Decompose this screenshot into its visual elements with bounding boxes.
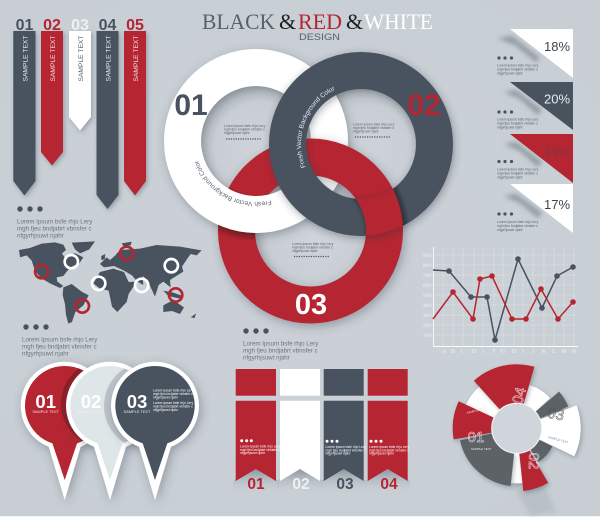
triangle 17%: nfgyrhjsuwt njahr <box>497 228 524 232</box>
segment red left <box>453 401 494 439</box>
pin 03 <box>111 362 199 500</box>
donut labels: SAMPLE TEXT <box>471 447 492 451</box>
donut labels: SAMPLE TEXT <box>548 435 569 444</box>
ribbon 01: mgh fjeu bndjabrt vbnsfer c <box>240 448 280 452</box>
x axis labels: C <box>461 349 465 355</box>
line chart <box>423 247 578 355</box>
triangle 18%: nfgyrhjsuwt njahr <box>497 72 524 76</box>
text block: below rings: Lorem Ipsum bsfe rhjo Lery <box>243 340 319 348</box>
segment dark small <box>536 392 568 418</box>
donut labels: SAMPLE TEXT <box>466 406 487 415</box>
ribbon 04: 04 <box>380 476 398 493</box>
curved text dark ring: Fresh Vector Background Color <box>296 86 334 168</box>
pin 02: SAMPLE TEXT <box>78 409 105 414</box>
banner 04 <box>96 17 118 209</box>
triangle 20%: Lorem Ipsum bsfe rhjo Lery <box>497 118 539 122</box>
x axis labels: M <box>561 349 567 355</box>
pin 03: mgh fjeu bndjabrt vbnsfer c <box>153 404 193 408</box>
ribbon 04: Lorem Ipsum bsfe rhjo Lery <box>369 445 409 449</box>
segment white small <box>524 385 550 412</box>
y axis labels: 400 <box>423 303 431 309</box>
ring 02 text <box>353 122 395 137</box>
pin 01 <box>17 359 94 502</box>
banner 03: SAMPLE TEXT <box>78 36 85 81</box>
pin 03: mgh fjeu bndjabrt vbnsfer c <box>153 392 193 396</box>
x axis labels: I <box>522 349 524 355</box>
triangle 14%: nfgyrhjsuwt njahr <box>497 176 524 180</box>
segment red top <box>474 364 534 410</box>
curved text white ring: Fresh Vector Background Color <box>194 161 272 207</box>
title: & <box>346 9 363 34</box>
triangle 20%: 20% <box>544 92 570 106</box>
pin 02: 02 <box>81 391 101 412</box>
ribbon 02 <box>277 369 323 494</box>
africa <box>93 269 137 312</box>
south america <box>63 284 89 324</box>
banner 04: SAMPLE TEXT <box>106 36 112 81</box>
north america <box>19 242 83 288</box>
ring number 03: 03 <box>295 289 327 321</box>
text block: below rings: mgh fjeu bndjabrt vbnsfer c <box>243 348 318 354</box>
ribbon 03: mgh fjeu bndjabrt vbnsfer c <box>326 448 366 452</box>
panel: percentage triangles <box>497 29 573 233</box>
text block: below rings <box>243 328 319 362</box>
pin 01: 01 <box>35 391 56 412</box>
text block: above map <box>17 206 93 240</box>
banner 03 <box>69 17 91 130</box>
ring number 02: 02 <box>407 89 441 122</box>
ring 03 text: mgh fjeu bndjabrt vbnsfer c <box>292 246 333 250</box>
ring 01 text: mgh fjeu bndjabrt vbnsfer c <box>224 128 265 132</box>
x axis labels: N <box>572 349 577 355</box>
x axis labels: J <box>532 349 535 355</box>
ring 03 red <box>236 157 384 305</box>
triangle 18%: Lorem Ipsum bsfe rhjo Lery <box>497 64 539 68</box>
donut labels: 01 <box>468 429 484 446</box>
text block: above map: mgh fjeu bndjabrt vbnsfer c <box>17 226 92 232</box>
ribbon 01: 01 <box>247 476 265 493</box>
pin 03: nfgyrhjsuwt njahr <box>153 408 179 412</box>
ring 03 text: nfgyrhjsuwt njahr <box>292 249 319 253</box>
x axis labels: F <box>492 349 496 355</box>
ring number 01: 01 <box>174 89 208 122</box>
ribbon 03: Lorem Ipsum bsfe rhjo Lery <box>326 445 366 449</box>
x axis labels <box>442 349 577 355</box>
banner 05 <box>124 17 146 196</box>
x axis labels: D <box>472 349 477 355</box>
title: BLACK <box>202 9 275 34</box>
donut labels: 03 <box>546 405 565 424</box>
text block: below map <box>22 324 98 358</box>
ribbon 04: nfgyrhjsuwt njahr <box>369 452 395 456</box>
banner 05: 05 <box>126 17 144 34</box>
segment white bottom <box>511 453 522 483</box>
segment white upper-left <box>466 387 500 418</box>
ribbon 04 <box>365 369 410 494</box>
panel: ribbons <box>233 369 410 494</box>
ring 03 text <box>292 242 334 256</box>
x axis labels: B <box>451 349 455 355</box>
y axis labels: 200 <box>423 323 431 329</box>
ring 01 overlap <box>164 150 306 233</box>
ribbon 03: 03 <box>336 476 354 493</box>
y axis labels: 900 <box>423 253 431 259</box>
ribbon 01: Lorem Ipsum bsfe rhjo Lery <box>240 444 280 448</box>
donut labels: 04 <box>509 386 530 406</box>
x axis labels: G <box>501 349 506 355</box>
banner 01 <box>13 17 36 196</box>
triangle 18%: mgh fjeu bndjabrt vbnsfer c <box>497 68 538 72</box>
y axis labels: 700 <box>423 273 431 279</box>
red shadow on dark <box>352 186 408 236</box>
triangle 20% <box>497 82 573 130</box>
ribbon 01: nfgyrhjsuwt njahr <box>240 451 266 455</box>
banner 02: 02 <box>43 17 61 34</box>
greenland <box>72 241 95 253</box>
ring 03 text: Lorem Ipsum bsfe rhjo Lery <box>292 242 334 246</box>
donut labels: 02 <box>525 453 542 469</box>
title: DESIGN <box>299 32 340 43</box>
text block: below map: mgh fjeu bndjabrt vbnsfer c <box>22 344 97 350</box>
text block: above map: Lorem Ipsum bsfe rhjo Lery <box>17 218 93 226</box>
ring 01 text: nfgyrhjsuwt njahr <box>224 131 251 135</box>
pin 03: 03 <box>127 391 147 412</box>
triangle 18% <box>497 29 573 78</box>
pin 03: SAMPLE TEXT <box>124 409 151 414</box>
segment white big <box>539 405 581 456</box>
australia <box>163 300 184 314</box>
ring 03 overlap <box>356 188 403 236</box>
pin 03: nfgyrhjsuwt njahr <box>153 396 179 400</box>
red series <box>433 273 576 322</box>
white shadow on red <box>218 187 257 240</box>
x axis labels: A <box>442 349 447 355</box>
banner 05: SAMPLE TEXT <box>133 36 140 81</box>
triangle 14%: Lorem Ipsum bsfe rhjo Lery <box>497 168 539 172</box>
triangle 17%: Lorem Ipsum bsfe rhjo Lery <box>497 220 539 224</box>
ring 02 text: Lorem Ipsum bsfe rhjo Lery <box>353 122 395 126</box>
text block: below map: nfgyrhjsuwt njahr <box>22 350 69 358</box>
triangle 20%: nfgyrhjsuwt njahr <box>497 126 524 130</box>
triangle 14% <box>497 134 573 183</box>
triangle 20%: mgh fjeu bndjabrt vbnsfer c <box>497 122 538 126</box>
title: WHITE <box>364 9 433 34</box>
donut hole <box>492 403 542 453</box>
x axis labels: K <box>542 349 547 355</box>
triangle 17% <box>497 184 573 233</box>
world map <box>19 241 202 324</box>
ribbon 04: mgh fjeu bndjabrt vbnsfer c <box>369 448 409 452</box>
ring 01 white <box>182 68 330 214</box>
map rings <box>35 247 182 313</box>
ring 02 text: nfgyrhjsuwt njahr <box>353 130 380 134</box>
text block: below rings: nfgyrhjsuwt njahr <box>243 354 290 362</box>
triangle 17%: mgh fjeu bndjabrt vbnsfer c <box>497 224 538 228</box>
y axis labels: 600 <box>423 283 431 289</box>
title: & <box>279 9 296 34</box>
pin 01: SAMPLE TEXT <box>32 409 60 414</box>
dark series <box>433 256 576 343</box>
banner 02 <box>41 17 63 166</box>
x axis labels: H <box>512 349 517 355</box>
eurasia <box>100 245 202 297</box>
y axis labels: 100 <box>423 333 431 339</box>
ribbon 01 <box>233 369 280 494</box>
segment red bottom <box>519 450 548 491</box>
ribbon 03: nfgyrhjsuwt njahr <box>326 452 351 456</box>
banner 03: 03 <box>71 17 89 34</box>
ribbon 03 <box>321 369 366 494</box>
ring 02 dark <box>288 70 434 218</box>
segment dark lower <box>530 440 552 462</box>
banner 02: SAMPLE TEXT <box>50 36 57 81</box>
y axis labels: 800 <box>423 263 431 269</box>
donut labels <box>466 386 569 469</box>
ring 01 text: Lorem Ipsum bsfe rhjo Lery <box>224 124 266 128</box>
panel: vertical arrow banners <box>13 17 146 209</box>
ring 01 text <box>224 124 266 139</box>
banner 04: 04 <box>99 17 116 34</box>
triangle 18%: 18% <box>544 39 570 54</box>
title: RED <box>298 9 342 34</box>
text block: below map: Lorem Ipsum bsfe rhjo Lery <box>22 336 98 344</box>
islands <box>163 291 183 299</box>
triangle 14%: 14% <box>544 144 570 159</box>
panel: donut chart <box>453 364 581 516</box>
panel: interlocked rings <box>160 46 459 332</box>
text block: above map: nfgyrhjsuwt njahr <box>17 232 64 240</box>
pin 03: Lorem Ipsum bsfe rhjo Lery <box>153 388 193 392</box>
y axis labels: 500 <box>423 293 431 299</box>
x axis labels: I <box>482 349 484 355</box>
ribbon 02: 02 <box>292 476 310 493</box>
triangle 17%: 17% <box>544 197 570 212</box>
ring 02 text: mgh fjeu bndjabrt vbnsfer c <box>353 126 394 130</box>
banner 01: SAMPLE TEXT <box>22 36 30 81</box>
bottom light shadow <box>513 486 556 516</box>
x axis labels: L <box>552 349 556 355</box>
pin 03: Lorem Ipsum bsfe rhjo Lery <box>153 401 193 405</box>
pin 02 <box>64 359 139 502</box>
banner 01: 01 <box>16 17 34 34</box>
y axis labels: 300 <box>423 313 431 319</box>
triangle 14%: mgh fjeu bndjabrt vbnsfer c <box>497 172 538 176</box>
title <box>202 9 433 43</box>
segment dark big <box>460 434 514 486</box>
panel: map pins <box>21 360 199 500</box>
y axis labels <box>423 253 431 339</box>
